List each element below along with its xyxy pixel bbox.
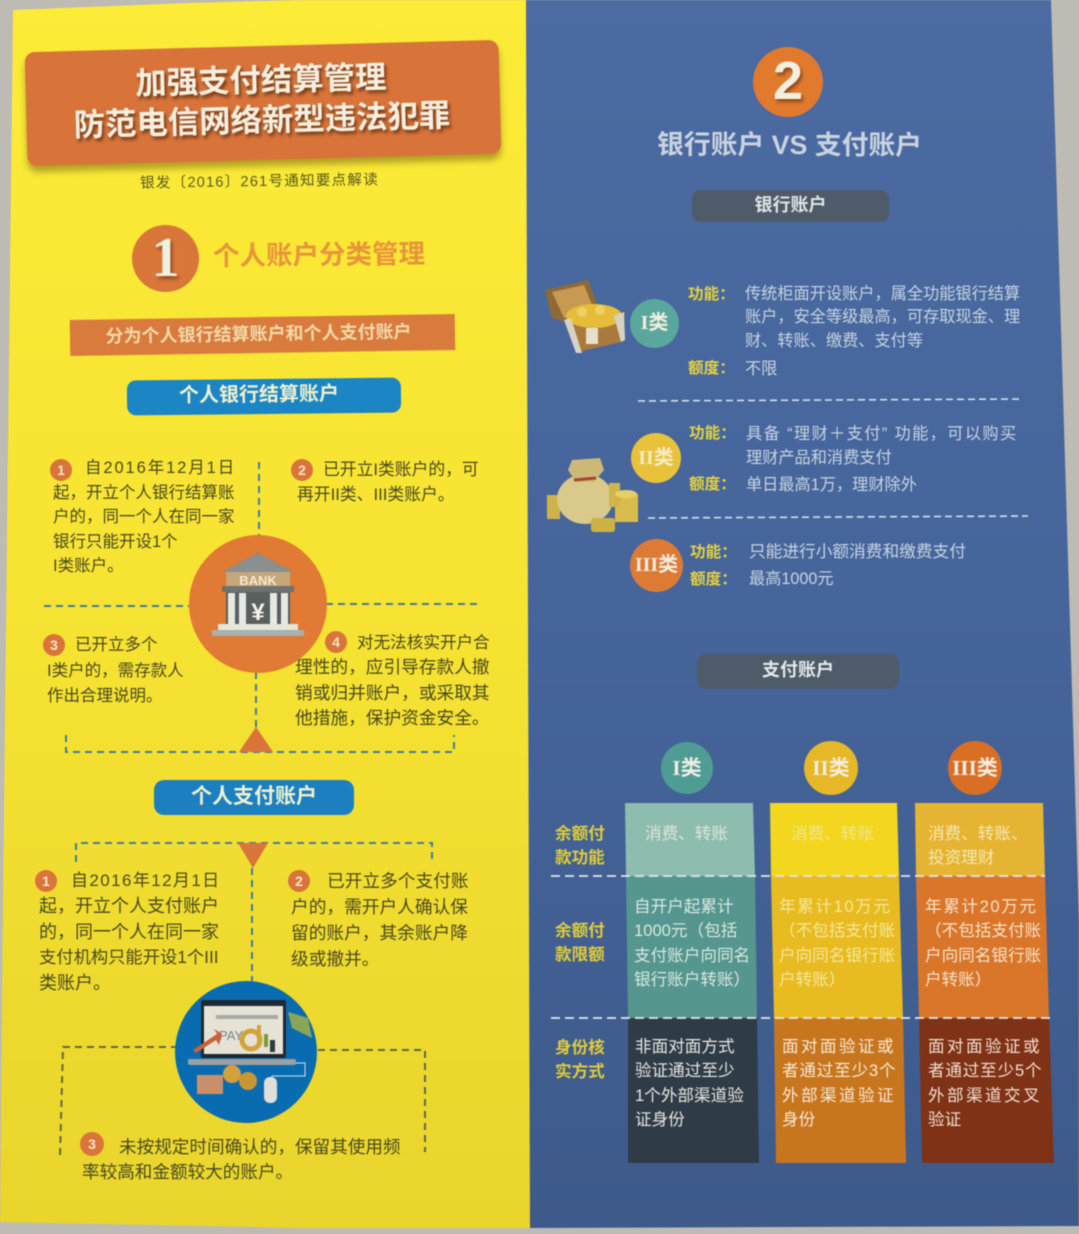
badge: class III bbox=[630, 539, 683, 592]
badge: number 1: 1 bbox=[152, 227, 180, 289]
number badge 1 bbox=[50, 459, 72, 481]
pill: bank account bbox=[692, 190, 889, 222]
column class III text: 者通过至少5个 bbox=[928, 1061, 1042, 1080]
badge: class I bbox=[630, 299, 679, 348]
text: bank item 1: 银行只能开设1个 bbox=[53, 533, 178, 551]
column class I text bbox=[634, 824, 750, 1129]
pill: personal bank account bbox=[127, 378, 401, 415]
text: bank item 1: 起，开立个人银行结算账 bbox=[53, 484, 234, 502]
text: class I function: 功能： bbox=[688, 286, 735, 303]
title banner: 加强支付结算管理 bbox=[135, 60, 387, 101]
text: class III function: 最高1000元 bbox=[749, 570, 834, 588]
column class II text bbox=[779, 824, 896, 1129]
column class III text: 外部渠道交叉 bbox=[928, 1086, 1042, 1105]
text: payment item 1 bbox=[34, 870, 221, 993]
number badge 2 bbox=[291, 459, 313, 481]
number badge 2: 2 bbox=[295, 873, 303, 889]
badge: table class II bbox=[804, 741, 858, 795]
number badge 2: 2 bbox=[298, 462, 306, 478]
column class II text: 户转账） bbox=[779, 970, 845, 989]
text: payment item 1: 的，同一个人在同一家 bbox=[39, 922, 219, 942]
row labels: 款限额 bbox=[555, 945, 605, 964]
column class III text: 面对面验证或 bbox=[928, 1037, 1042, 1056]
pill: payment account bbox=[697, 654, 899, 689]
text: payment item 1: 自2016年12月1日 bbox=[71, 871, 221, 890]
badge: class I: I类 bbox=[641, 312, 668, 334]
text: class I function: 不限 bbox=[745, 360, 777, 378]
text: class III function bbox=[690, 542, 966, 588]
text: bank item 3: 已开立多个 bbox=[75, 636, 158, 654]
text: payment item 2: 留的账户，其余账户降 bbox=[291, 923, 468, 943]
text: bank item 4: 对无法核实开户合 bbox=[357, 633, 490, 652]
text: bank item 2: 已开立I类账户的，可 bbox=[323, 460, 479, 479]
title banner: 防范电信网络新型违法犯罪 bbox=[73, 98, 451, 143]
pill: bank account: 银行账户 bbox=[754, 195, 826, 215]
text: class I function: 额度： bbox=[688, 360, 735, 377]
number badge 4: 4 bbox=[332, 634, 340, 650]
column class III text: （不包括支付账 bbox=[925, 921, 1041, 940]
text: bank item 1: 户的，同一个人在同一家 bbox=[53, 508, 234, 526]
column class II text: 外部渠道验证 bbox=[782, 1086, 896, 1105]
text: bank item 1: I类账户。 bbox=[53, 557, 124, 575]
number badge 4 bbox=[325, 631, 347, 653]
column class I text: 证身份 bbox=[635, 1110, 685, 1129]
text: payment item 2: 级或撤并。 bbox=[291, 949, 379, 969]
text: bank item 3: I类户的，需存款人 bbox=[47, 662, 184, 680]
badge: table class II: II类 bbox=[812, 756, 850, 780]
text: class I function: 账户，安全等级最高，可存取现金、理 bbox=[745, 308, 1020, 326]
column class III text: 户转账） bbox=[925, 970, 991, 989]
number badge 3: 3 bbox=[50, 637, 58, 653]
text: class I function bbox=[688, 284, 1020, 378]
column class II text: 身份 bbox=[782, 1110, 815, 1129]
text: payment item 1: 类账户。 bbox=[39, 973, 111, 993]
text: bank item 3 bbox=[42, 634, 184, 705]
column class III text bbox=[925, 824, 1042, 1129]
row labels: 身份核 bbox=[555, 1038, 605, 1057]
text: payment item 1: 支付机构只能开设1个III bbox=[39, 947, 219, 967]
text: bank item 1 bbox=[49, 458, 236, 575]
text: payment item 3: 未按规定时间确认的，保留其使用频 bbox=[119, 1137, 401, 1157]
badge: class III: III类 bbox=[635, 554, 678, 576]
badge: table class III: III类 bbox=[952, 756, 998, 780]
strip: account classes: 分为个人银行结算账户和个人支付账户 bbox=[105, 322, 412, 346]
pill: personal bank account: 个人银行结算账户 bbox=[179, 383, 339, 407]
column class I text: 1000元（包括 bbox=[634, 921, 737, 940]
row labels bbox=[554, 824, 605, 1081]
icon: bank: ¥ bbox=[251, 599, 265, 626]
column class I text: 消费、转账 bbox=[645, 824, 728, 843]
text: class II function: 额度： bbox=[689, 476, 736, 493]
column class III text: 投资理财 bbox=[928, 848, 994, 867]
text: class II function: 具备 “理财＋支付” 功能，可以购买 bbox=[746, 425, 1018, 443]
text: class I function: 传统柜面开设账户，属全功能银行结算 bbox=[745, 285, 1020, 303]
number badge 1: 1 bbox=[57, 462, 65, 478]
column class III text: 验证 bbox=[928, 1110, 961, 1129]
text: class II function: 功能： bbox=[689, 425, 736, 442]
badge: table class III bbox=[948, 741, 1002, 795]
number badge 1: 1 bbox=[42, 873, 50, 889]
badge: table class I: I类 bbox=[672, 756, 702, 780]
badge: class II: II类 bbox=[638, 447, 674, 469]
number badge 3 bbox=[80, 1132, 104, 1156]
pill: personal payment account: 个人支付账户 bbox=[191, 785, 317, 808]
badge: table class I bbox=[661, 742, 713, 794]
heading: section 1: 个人账户分类管理 bbox=[213, 239, 425, 271]
badge: number 2: 2 bbox=[773, 51, 803, 111]
icon: bank: BANK bbox=[239, 573, 277, 588]
icon: laptop payment: PAY bbox=[219, 1028, 243, 1043]
column class II text: 者通过至少3个 bbox=[782, 1061, 896, 1080]
text: payment item 2: 已开立多个支付账 bbox=[327, 871, 469, 891]
column class I text: 验证通过至少 bbox=[635, 1061, 735, 1080]
column class II text: 户向同名银行账 bbox=[779, 946, 895, 965]
text: class III function: 只能进行小额消费和缴费支付 bbox=[749, 542, 966, 561]
text: class III function: 额度： bbox=[690, 571, 737, 588]
column class III text: 年累计20万元 bbox=[925, 897, 1038, 916]
text: bank item 2: 再开II类、III类账户。 bbox=[297, 485, 455, 504]
column class III text: 户向同名银行账 bbox=[925, 946, 1041, 965]
text: payment item 2: 户的，需开户人确认保 bbox=[291, 897, 468, 917]
column class II text: 年累计10万元 bbox=[779, 897, 892, 916]
text: class II function: 理财产品和消费支付 bbox=[746, 449, 892, 467]
column class I text: 非面对面方式 bbox=[635, 1037, 735, 1056]
column class II text: 面对面验证或 bbox=[782, 1037, 896, 1056]
column class II text: 消费、转账 bbox=[791, 824, 874, 843]
number badge 1 bbox=[35, 870, 57, 892]
text: class II function: 单日最高1万，理财除外 bbox=[746, 476, 917, 494]
text: payment item 1: 起，开立个人支付账户 bbox=[39, 896, 219, 916]
row labels: 款功能 bbox=[555, 848, 605, 867]
pill: personal payment account bbox=[154, 780, 354, 815]
text: class II function bbox=[688, 424, 1018, 494]
text: bank item 4: 他措施，保护资金安全。 bbox=[295, 708, 490, 728]
text: payment item 3 bbox=[80, 1132, 401, 1182]
text: bank item 4: 销或归并账户，或采取其 bbox=[295, 683, 490, 703]
text: bank item 4: 理性的，应引导存款人撤 bbox=[295, 657, 490, 677]
text: class III function: 功能： bbox=[690, 544, 737, 561]
column class I text: 自开户起累计 bbox=[634, 897, 734, 916]
column class I text: 1个外部渠道验 bbox=[635, 1086, 744, 1105]
column class II text: （不包括支付账 bbox=[779, 921, 895, 940]
badge: number 2 bbox=[753, 47, 823, 117]
column class III text: 消费、转账、 bbox=[928, 824, 1028, 843]
text: bank item 1: 自2016年12月1日 bbox=[85, 459, 236, 477]
heading: bank vs payment account: 银行账户 VS 支付账户 bbox=[657, 130, 922, 160]
text: bank item 3: 作出合理说明。 bbox=[47, 687, 162, 705]
number badge 3: 3 bbox=[88, 1136, 96, 1152]
badge: class II bbox=[631, 433, 681, 483]
row labels: 余额付 bbox=[555, 921, 605, 940]
pill: payment account: 支付账户 bbox=[762, 660, 834, 680]
strip: account classes bbox=[70, 314, 455, 356]
text: class I function: 财、转账、缴费、支付等 bbox=[745, 332, 923, 350]
row labels: 余额付 bbox=[555, 824, 605, 843]
column class I text: 支付账户向同名 bbox=[634, 946, 750, 965]
text: payment item 3: 率较高和金额较大的账户。 bbox=[82, 1162, 293, 1182]
subtitle: 银发〔2016〕261号通知要点解读 bbox=[140, 172, 379, 192]
column class I text: 银行账户转账） bbox=[634, 970, 750, 989]
row labels: 实方式 bbox=[555, 1062, 605, 1081]
text: bank item 2 bbox=[290, 458, 479, 504]
text: payment item 2 bbox=[288, 870, 469, 969]
number badge 3 bbox=[43, 634, 65, 656]
number badge 2 bbox=[288, 870, 310, 892]
badge: number 1 bbox=[132, 225, 199, 292]
text: bank item 4 bbox=[294, 630, 490, 728]
title banner bbox=[25, 40, 501, 166]
